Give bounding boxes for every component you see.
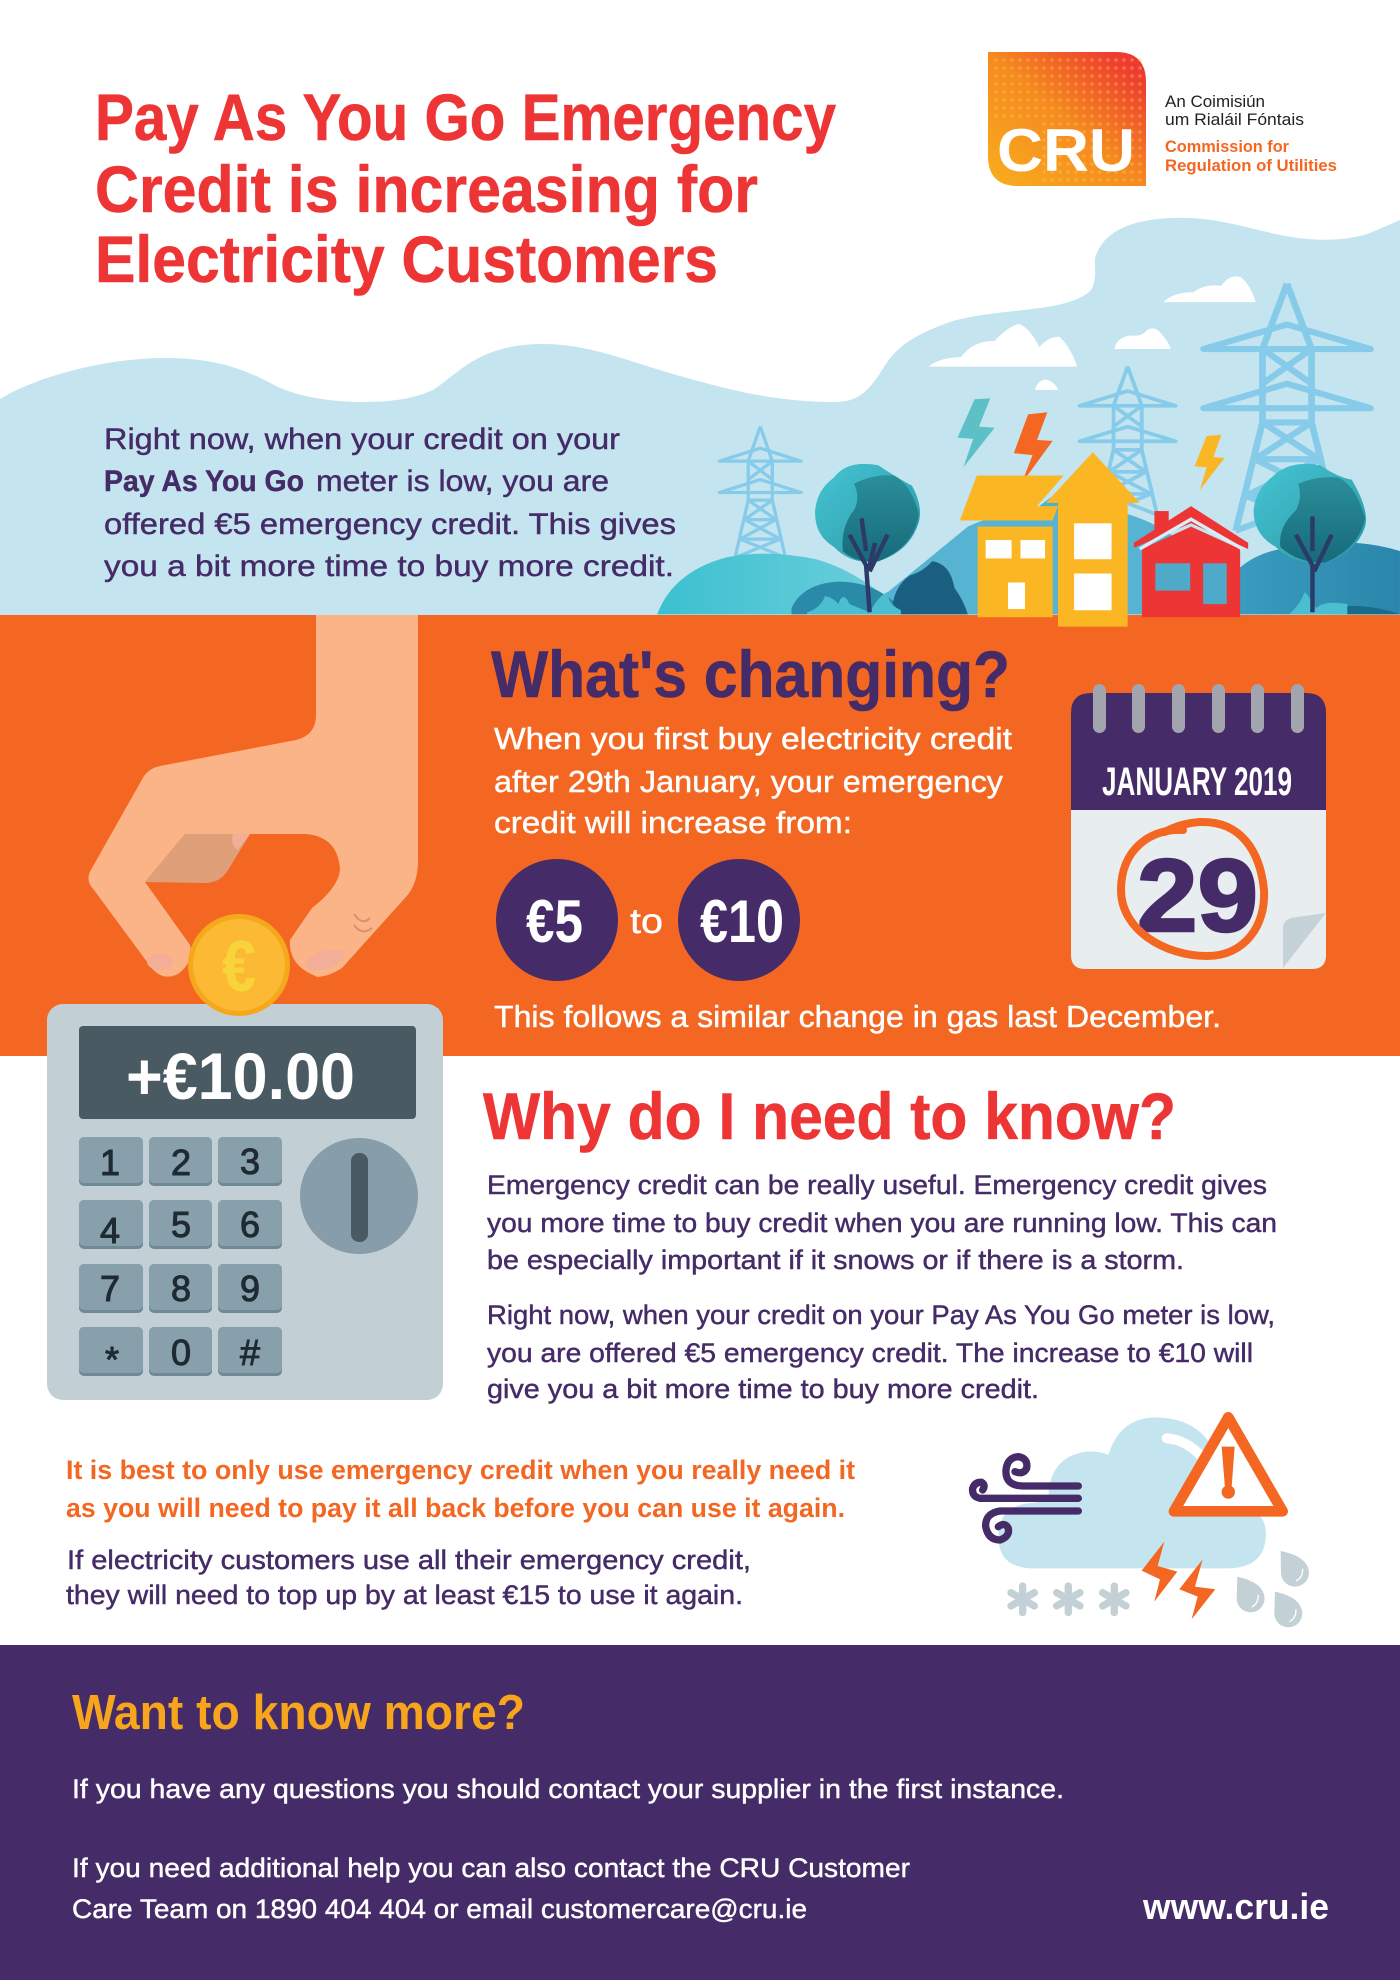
text block: what's changing: [494, 721, 1012, 840]
keypad: 6: [240, 1204, 260, 1245]
icon: red house: [1134, 506, 1248, 617]
title: [95, 80, 836, 296]
icon: prepay meter: +€10.00: [126, 1039, 355, 1113]
icon: lightning bolts: [958, 398, 1225, 490]
icon: euro coin: [188, 914, 290, 1016]
illustration: pylons, clouds, hills, trees and houses: [657, 276, 1400, 614]
keypad: 4: [100, 1210, 120, 1251]
logo: CRU: [988, 52, 1337, 186]
pylon: large: [1204, 284, 1370, 531]
pylon: small: [719, 427, 801, 557]
text block: why know paragraph 1: Emergency credit can be really useful. Emergency credit gives: [487, 1170, 1267, 1200]
logo: CRU: Commission for: [1165, 137, 1289, 156]
logo: CRU: um Rialáil Fóntais: [1165, 110, 1304, 129]
keypad: [79, 1137, 282, 1380]
text block: top up note: they will need to top up by at least €15 to use it again.: [66, 1580, 743, 1610]
icon: euro coin: €: [222, 927, 256, 1007]
icon: yellow house: [960, 476, 1066, 617]
hills: [657, 506, 1400, 614]
heading: Why do I need to know: Why do I need to know?: [483, 1079, 1176, 1153]
tree: left: [815, 464, 920, 612]
intro text block: offered €5 emergency credit. This gives: [104, 508, 676, 541]
text block: top up note: If electricity customers use all their emergency credit,: [67, 1545, 751, 1575]
icon: calendar: 29: [1137, 838, 1258, 953]
text block: why know paragraph 2: [487, 1300, 1275, 1404]
text block: what's changing: after 29th January, your emergency: [494, 764, 1004, 799]
icon: hand: [88, 615, 418, 977]
dial: [300, 1138, 418, 1254]
keypad: #: [240, 1332, 260, 1373]
callout: orange warning text: It is best to only use emergency credit when you really need it: [66, 1455, 855, 1485]
website link text: www.cru.ie: [1142, 1886, 1329, 1927]
intro text block: Pay As You Go: [104, 465, 304, 498]
logo: CRU: Regulation of Utilities: [1165, 156, 1337, 175]
intro text block: [104, 423, 676, 583]
tree: right: [1254, 464, 1366, 612]
text block: why know paragraph 2: Right now, when your credit on your Pay As You Go meter is low,: [487, 1300, 1275, 1330]
heading: Want to know more: Want to know more?: [72, 1686, 525, 1740]
keypad: 9: [240, 1268, 260, 1309]
icon: prepay meter: [47, 1004, 443, 1400]
pylon: medium: [1080, 367, 1176, 515]
background wave: pale blue sky: [0, 218, 1400, 620]
title: Pay As You Go Emergency: [95, 80, 836, 154]
text block: contact supplier: If you have any questions you should contact your supplier in the first instance.: [72, 1774, 1064, 1804]
text: similar change note: This follows a similar change in gas last December.: [494, 999, 1221, 1034]
text block: why know paragraph 2: you are offered €5 emergency credit. The increase to €10 will: [487, 1338, 1253, 1368]
text block: why know paragraph 1: [487, 1170, 1277, 1275]
text block: what's changing: When you first buy electricity credit: [494, 721, 1012, 756]
keypad: 7: [100, 1268, 120, 1309]
heading: What's changing: What's changing?: [491, 637, 1010, 711]
title: Electricity Customers: [95, 222, 718, 296]
panel: orange What's changing band: [0, 615, 1400, 1056]
logo: CRU: An Coimisiún: [1165, 92, 1265, 111]
icon: storm and warning: [973, 1417, 1309, 1627]
keypad: 0: [171, 1332, 191, 1373]
text block: what's changing: credit will increase from:: [494, 805, 852, 840]
text block: why know paragraph 1: you more time to buy credit when you are running low. This can: [487, 1208, 1277, 1238]
label: to: to: [630, 902, 663, 941]
keypad: *: [105, 1339, 119, 1380]
callout: orange warning text: as you will need to pay it all back before you can use it again.: [66, 1493, 845, 1523]
panel: purple footer: [0, 1645, 1400, 1980]
text block: contact CRU: Care Team on 1890 404 404 or email customercare@cru.ie: [72, 1894, 807, 1924]
callout: 5 euro circle: €5: [526, 888, 583, 955]
icon: calendar: [1071, 684, 1326, 969]
text block: contact CRU: If you need additional help you can also contact the CRU Customer: [72, 1853, 910, 1883]
text block: why know paragraph 1: be especially important if it snows or if there is a storm.: [487, 1245, 1184, 1275]
keypad: 1: [100, 1142, 120, 1183]
illustration: houses and lightning: [958, 398, 1248, 627]
icon: tall house: [1046, 452, 1140, 627]
intro text block: you a bit more time to buy more credit.: [104, 550, 674, 583]
text block: why know paragraph 2: give you a bit more time to buy more credit.: [487, 1374, 1039, 1404]
title: Credit is increasing for: [95, 152, 758, 226]
text block: contact CRU: [72, 1853, 910, 1924]
keypad: 8: [171, 1268, 191, 1309]
callout: 10 euro circle: €10: [700, 888, 784, 955]
icon: calendar: JANUARY 2019: [1102, 760, 1292, 804]
clouds: [929, 276, 1256, 390]
callout: 5 euro circle: [496, 859, 618, 981]
keypad: 2: [171, 1142, 191, 1183]
intro text block: Right now, when your credit on your: [104, 423, 620, 456]
callout: 10 euro circle: [678, 859, 800, 981]
text block: top up note: [66, 1545, 751, 1610]
callout: orange warning text: [66, 1455, 855, 1523]
keypad: 5: [171, 1204, 191, 1245]
logo: CRU: CRU: [997, 117, 1135, 184]
keypad: 3: [240, 1141, 260, 1182]
intro text block: meter is low, you are: [316, 465, 609, 498]
